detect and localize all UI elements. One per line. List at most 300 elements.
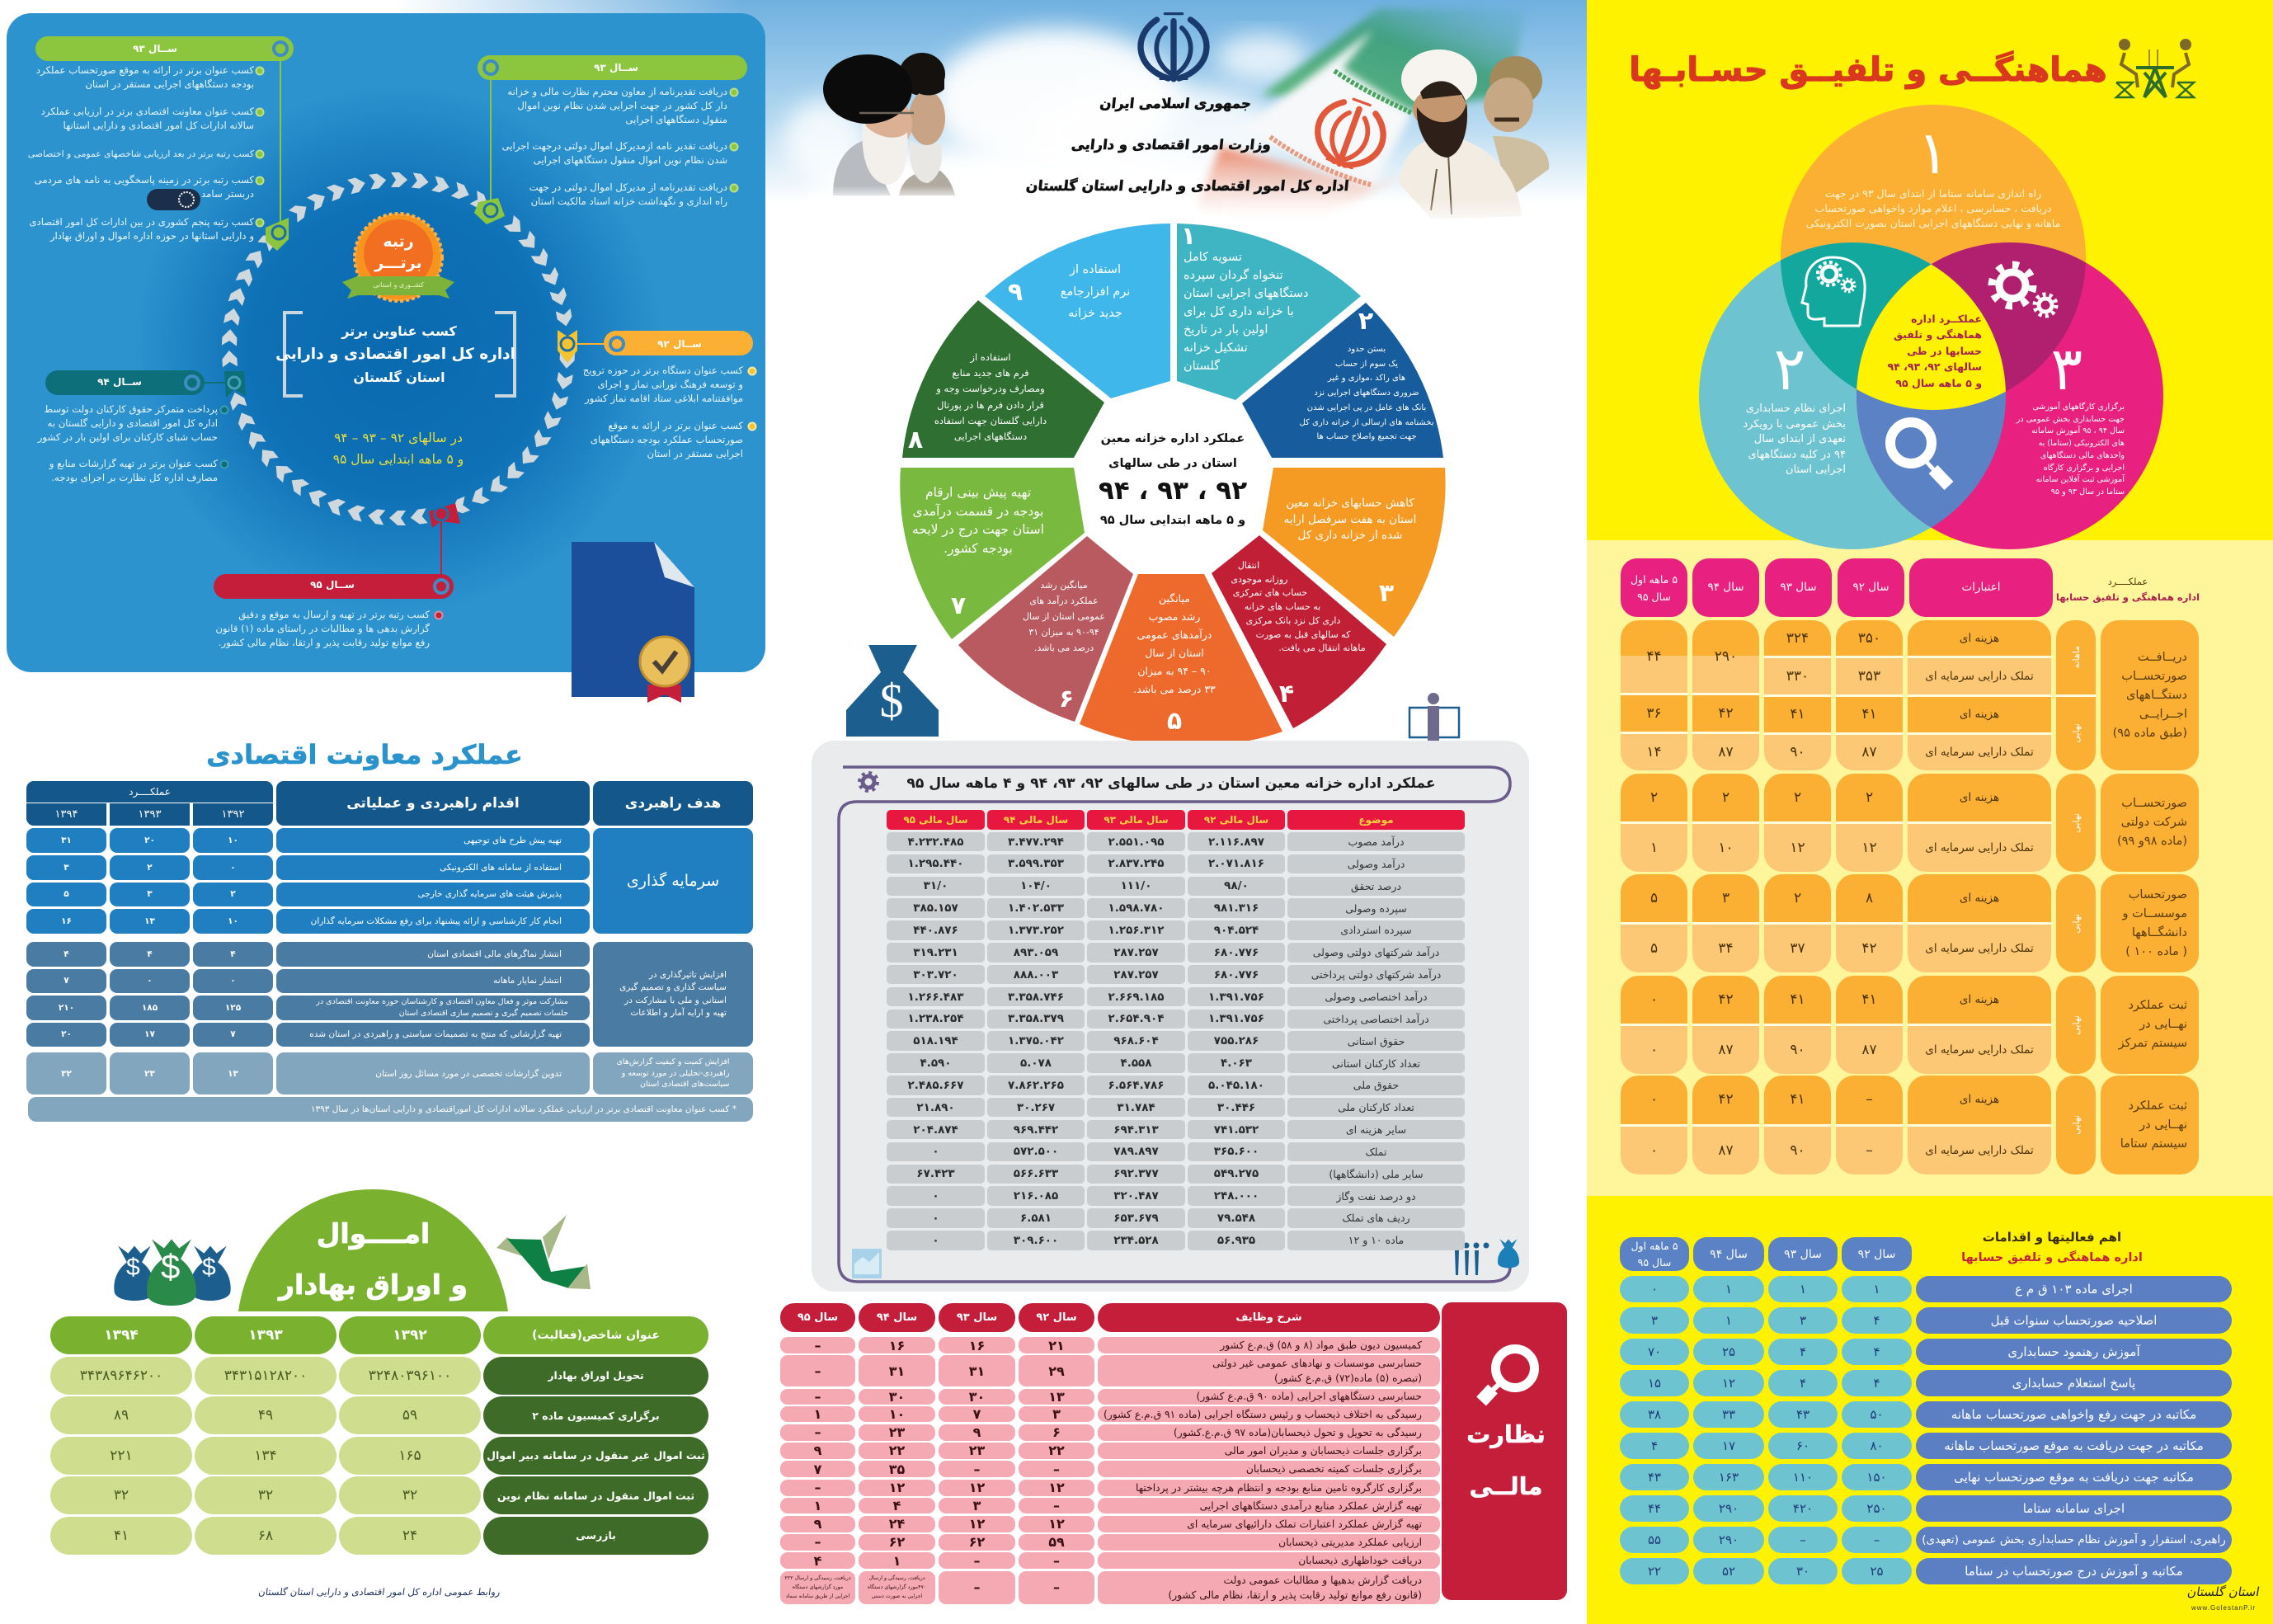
assets and securities table: عنوان شاخص(فعالیت) bbox=[532, 1329, 660, 1342]
treasury table: ۱.۲۶۶.۴۸۳ bbox=[908, 990, 963, 1003]
dollar signs: $ bbox=[126, 1254, 140, 1281]
oversight table body: ۳ bbox=[973, 1498, 981, 1513]
text: year 93 left list: کسب رتبه برتر در بعد ارزیابی شاخصهای عمومی و اختصاصی bbox=[28, 148, 254, 159]
oversight table body: ۱۲ bbox=[969, 1480, 985, 1495]
table 1 group: executive statements: ۱۴ bbox=[1646, 744, 1662, 760]
table 1 group: executive statements: تملک دارایی سرمایه ای bbox=[1925, 670, 2034, 683]
treasury table: سایر ملی (دانشگاهها) bbox=[1329, 1168, 1424, 1180]
center brackets bbox=[285, 313, 515, 396]
table 1 group: executive statements: (طبق ماده ۹۵) bbox=[2113, 726, 2187, 739]
treasury table: درصد تحقق bbox=[1351, 880, 1401, 892]
treasury table: ۷۴۱.۵۳۲ bbox=[1214, 1123, 1259, 1137]
table 1 group: institutions: ۴۲ bbox=[1861, 940, 1877, 957]
oversight table header: سال ۹۳ bbox=[957, 1311, 997, 1324]
icon: chart bbox=[852, 1249, 882, 1278]
table 1 group: state company: ۱ bbox=[1650, 840, 1658, 856]
wheel segment text 2: جهت تجمیع واصلاح حساب ها bbox=[1316, 432, 1417, 441]
economic table header: هدف راهبردی bbox=[625, 795, 721, 812]
venn center text: و ۵ ماهه سال ۹۵ bbox=[1895, 377, 1982, 389]
venn text 1: ماهانه و نهایی دستگاههای اجرایی استان بصورت الکترونیکی bbox=[1806, 217, 2060, 229]
economic table group: investment: تهیه پیش طرح های توجیهی bbox=[464, 836, 562, 845]
treasury table: ۷۵۵.۲۸۶ bbox=[1214, 1034, 1259, 1047]
treasury table: ۶۹۲.۳۷۷ bbox=[1113, 1167, 1159, 1180]
assets and securities table: ۶۸ bbox=[258, 1528, 273, 1544]
table 2 activities: اجرای ماده ۱۰۳ ق م ع bbox=[2015, 1282, 2133, 1297]
economic table group: investment bbox=[26, 828, 753, 934]
oversight table body: ۲۳ bbox=[969, 1443, 985, 1458]
economic table group: policy influence: تهیه گزارشاتی که منتج به تصمیمات سیاستی و راهبردی در استان شده bbox=[309, 1029, 562, 1039]
table 1 group: institutions: ۳۷ bbox=[1790, 940, 1805, 957]
treasury table: درآمد وصولی bbox=[1348, 858, 1405, 870]
economic table group: policy influence: ۷ bbox=[230, 1029, 236, 1039]
table 1 group: central system: ۸۷ bbox=[1861, 1042, 1877, 1058]
treasury table: ۶.۵۶۴.۷۸۶ bbox=[1108, 1079, 1164, 1092]
treasury table: ۶۸۰.۷۷۶ bbox=[1214, 946, 1259, 959]
oversight table body: حسابرسی دستگاههای اجرایی (ماده ۹۰ ق.م.ع کشور) bbox=[1197, 1391, 1422, 1402]
oversight table body: ۹ bbox=[973, 1424, 981, 1440]
economic table group: reports: تدوین گزارشات تخصصی در مورد مسائل روز استان bbox=[375, 1069, 562, 1079]
economic table group: policy influence: ۷ bbox=[64, 976, 69, 986]
table 2 activities: ۱۱۰ bbox=[1793, 1470, 1813, 1485]
pill label yellow: ســال ۹۲ bbox=[657, 338, 702, 350]
table 1 group: state company: ۱۰ bbox=[1718, 840, 1734, 856]
oversight table body: رسیدگی به اختلاف ذیحساب و رئیس دستگاه اجرایی (ماده ۹۱ ق.م.ع کشور) bbox=[1104, 1409, 1422, 1420]
pill label teal: ســال ۹۴ bbox=[97, 376, 142, 388]
table 1 header bbox=[1621, 558, 2053, 617]
header titles: اداره کل امور اقتصادی و دارایی استان گلستان bbox=[1025, 178, 1350, 195]
wheel segment text 4: ماهانه انتقال می یافت. bbox=[1278, 643, 1366, 653]
oversight table body: (تبصره (۵) ماده(۷۲) ق.م.ع کشور) bbox=[1274, 1372, 1422, 1384]
dollar sign on money bag: $ bbox=[879, 674, 904, 727]
seal text: رتبه bbox=[383, 233, 414, 251]
treasury table: ۳۱۹.۲۳۱ bbox=[913, 946, 958, 959]
treasury table: ۳.۳۵۸.۷۴۶ bbox=[1008, 990, 1064, 1003]
economic table group: policy influence: ۰ bbox=[230, 976, 236, 986]
economic table group: reports bbox=[28, 1052, 753, 1094]
wheel segment text 8: قرار دادن فرم ها در پورتال bbox=[937, 399, 1044, 411]
treasury table: ۵۶۶.۶۳۳ bbox=[1014, 1167, 1058, 1180]
table 1 group: sanama system: نهــایی در bbox=[2139, 1118, 2187, 1132]
wheel segment text 7: بودجه در قسمت درآمدی bbox=[913, 503, 1043, 518]
table 2 activities: ۱۶۳ bbox=[1719, 1470, 1739, 1485]
ribbon text: کشــوری و استانی bbox=[373, 281, 424, 289]
treasury table: سپرده استردادی bbox=[1340, 924, 1412, 936]
panel: yellow right column background bbox=[1587, 0, 2273, 1624]
treasury table: درآمد مصوب bbox=[1348, 836, 1405, 848]
table 2 activities: اجرای سامانه ستاما bbox=[2023, 1501, 2125, 1516]
oversight table body: ۲۱ bbox=[1048, 1338, 1065, 1353]
oversight table body: ۳۵ bbox=[889, 1462, 905, 1477]
oversight table header: سال ۹۴ bbox=[877, 1311, 917, 1324]
oversight table header: سال ۹۲ bbox=[1036, 1311, 1077, 1324]
treasury table: ۱.۲۵۶.۳۱۲ bbox=[1108, 924, 1164, 937]
oversight table body: ۱۶ bbox=[889, 1338, 905, 1353]
wheel segment text 5: ۳۳ درصد می باشد. bbox=[1133, 683, 1216, 695]
economic table group: policy influence: ۴ bbox=[147, 949, 153, 959]
wheel segment text 3: کاهش حسابهای خزانه معین bbox=[1286, 497, 1414, 510]
wheel segment text 1: اولین بار در تاریخ bbox=[1184, 323, 1268, 337]
table 1 group: central system: ۸۷ bbox=[1718, 1042, 1734, 1058]
economic table group: investment: ۰ bbox=[230, 863, 236, 873]
table 1 group: sanama system: سیستم ستاما bbox=[2120, 1137, 2187, 1150]
treasury table: درآمد شرکتهای دولتی پرداختی bbox=[1311, 968, 1441, 981]
economic table group: reports: ۳۲ bbox=[61, 1069, 72, 1079]
oversight panel title: مالــی bbox=[1470, 1472, 1542, 1500]
panel: top ranks background bbox=[7, 13, 765, 672]
table 2 header: سال ۹۲ bbox=[1858, 1247, 1895, 1260]
table 1 group: sanama system: ۹۰ bbox=[1790, 1142, 1805, 1159]
wheel segment text 4: روزانه موجودی bbox=[1231, 574, 1288, 585]
icon: magnifier bbox=[1890, 422, 1949, 486]
table 2 activities: ۱ bbox=[1873, 1282, 1880, 1297]
assets and securities table: ۳۲ bbox=[402, 1487, 417, 1504]
venn number 2: ۲ bbox=[1774, 334, 1805, 403]
oversight table body: ۲۲ bbox=[1048, 1443, 1065, 1458]
economic table group: reports: افزایش کمیت و کیفیت گزارش‌های bbox=[617, 1057, 730, 1066]
oversight table body: ارزیابی عملکرد مدیریتی ذیحسابان bbox=[1278, 1537, 1422, 1548]
venn text 3: ستاما در سال ۹۳ و ۹۵ bbox=[2051, 487, 2125, 497]
treasury table: ۴۴۰.۸۷۶ bbox=[913, 924, 958, 937]
table 1 header: سال ۹۵ bbox=[1637, 591, 1671, 602]
venn text 3: های الکترونیکی (ستاما) به bbox=[2039, 439, 2125, 448]
oversight table body: – bbox=[973, 1579, 980, 1595]
treasury table: تملک bbox=[1365, 1146, 1387, 1158]
table 1 group: state company: ۲ bbox=[1722, 789, 1729, 806]
panel: treasury table background bbox=[812, 741, 1529, 1292]
header titles: جمهوری اسلامی ایران bbox=[1099, 96, 1252, 111]
saamad logo bbox=[147, 189, 200, 210]
venn number 3: ۳ bbox=[2051, 334, 2082, 403]
wheel numbers: ۱ bbox=[1181, 222, 1196, 251]
wheel numbers: ۴ bbox=[1279, 680, 1294, 708]
treasury table: ۲.۶۶۹.۱۸۵ bbox=[1108, 990, 1164, 1003]
table 1 group: executive statements: دریــافــت bbox=[2138, 650, 2187, 663]
economic table group: investment: استفاده از سامانه های الکترونیکی bbox=[440, 863, 562, 873]
wheel center text bbox=[1099, 432, 1247, 527]
assets and securities table: ۴۹ bbox=[258, 1407, 273, 1424]
economic table group: investment: ۱۶ bbox=[61, 916, 72, 926]
table 1 group: state company: ۲ bbox=[1650, 789, 1658, 806]
period subtitle: در سالهای ۹۲ – ۹۳ – ۹۴ bbox=[334, 431, 463, 445]
oversight table body: ۲۳ bbox=[889, 1424, 905, 1440]
table 1 header: ۵ ماهه اول bbox=[1631, 572, 1678, 586]
economic table group: policy influence: ۱۸۵ bbox=[142, 1003, 158, 1013]
wheel numbers bbox=[908, 222, 1394, 736]
wheel segment text 1: با خزانه داری کل برای bbox=[1184, 305, 1294, 318]
text: year 93 right list: راه اندازی و نگهداشت خزانه اسناد مالکیت استان bbox=[531, 195, 727, 207]
text: year 92 list: صورتحساب عملکرد بودجه دستگاههای bbox=[591, 434, 743, 445]
economic table group: policy influence: مشارکت موثر و فعال معاون اقتصادی و کارشناسان حوزه معاونت اقتصادی در bbox=[316, 997, 568, 1006]
table 2 activities: راهبری، استقرار و آموزش نظام حسابداری بخش عمومی (تعهدی) bbox=[1922, 1533, 2226, 1546]
assets and securities table: ۸۹ bbox=[114, 1407, 129, 1424]
table 2 activities: ۶۰ bbox=[1796, 1438, 1809, 1453]
treasury table: ۶۷.۴۲۳ bbox=[916, 1167, 955, 1180]
treasury table: ۱.۲۹۵.۴۴۰ bbox=[908, 857, 963, 870]
table 1 group: institutions: ۳ bbox=[1722, 890, 1729, 906]
text: year 95 list: کسب رتبه برتر در تهیه و ارسال به موقع و دقیق bbox=[238, 609, 430, 620]
assets and securities table: ثبت اموال غیر منقول در سامانه دبیر اموال bbox=[487, 1449, 705, 1462]
economic table header bbox=[26, 781, 753, 826]
wheel segment text 4: حساب های تمرکزی bbox=[1233, 587, 1307, 598]
table 1 group: state company: هزینه ای bbox=[1960, 791, 1999, 804]
table 1 group: executive statements: ۴۴ bbox=[1646, 648, 1662, 665]
venn center text bbox=[1878, 311, 1982, 391]
wheel center text: ۹۲ ، ۹۳ ، ۹۴ bbox=[1099, 476, 1247, 506]
oversight table body: – bbox=[1053, 1553, 1060, 1569]
seal text: برتـــر bbox=[374, 254, 422, 272]
oversight table body: ۳۱ bbox=[889, 1363, 905, 1379]
icon: magnifier white bbox=[1481, 1349, 1534, 1401]
treasury table: ۳.۴۷۷.۲۹۴ bbox=[1008, 836, 1064, 849]
icon: head with gears bbox=[1802, 257, 1865, 326]
oversight table body: ۶۲ bbox=[889, 1534, 905, 1550]
table 2 activities: ۲۹۰ bbox=[1719, 1532, 1739, 1547]
treasury table: ۲.۸۳۷.۲۴۵ bbox=[1108, 857, 1164, 870]
table 2 activities: اصلاحیه صورتحساب سنوات قبل bbox=[1991, 1313, 2157, 1328]
table 2 header: سال ۹۴ bbox=[1710, 1247, 1748, 1260]
text: year 93 right list: دار کل کشور در جهت اجرایی شدن نظام نوین اموال bbox=[517, 100, 727, 111]
venn center text: هماهنگی و تلفیق bbox=[1894, 328, 1982, 341]
text: year 92 list: کسب عنوان دستگاه برتر در حوزه ترویج bbox=[583, 365, 743, 376]
treasury table: ۱.۳۷۳.۲۵۲ bbox=[1008, 924, 1064, 937]
table 2 activities: پاسخ استعلام حسابداری bbox=[2012, 1376, 2135, 1391]
table 1 group: central system: نهــایی در bbox=[2139, 1018, 2187, 1031]
economic table group: investment: ۱۳ bbox=[144, 916, 155, 926]
venn text 1 bbox=[1804, 186, 2063, 231]
period subtitle bbox=[333, 431, 464, 467]
table 1 group: institutions: ۸ bbox=[1866, 890, 1873, 906]
table 1 group: sanama system: ۰ bbox=[1650, 1091, 1658, 1108]
table 1 group: central system: ۴۲ bbox=[1718, 991, 1734, 1008]
wheel segment text 2: بخشنامه های ارسالی از خزانه داری کل bbox=[1299, 418, 1434, 427]
treasury table: ۲۸۷.۲۵۷ bbox=[1113, 946, 1159, 959]
table 2 activities: مکاتبه در جهت دریافت به موقع صورتحساب ماهانه bbox=[1944, 1438, 2204, 1453]
treasury table: سال مالی ۹۲ bbox=[1204, 814, 1268, 826]
table 1 group: institutions: دانشگــاهها bbox=[2132, 925, 2187, 939]
treasury table: ۳۱/۰ bbox=[924, 879, 948, 892]
wheel numbers: ۹ bbox=[1008, 278, 1023, 307]
oversight table body: حسابرسی موسسات و نهادهای عمومی غیر دولتی bbox=[1212, 1358, 1422, 1369]
wheel numbers: ۸ bbox=[908, 426, 923, 454]
treasury table: ۰ bbox=[932, 1212, 939, 1225]
dome title bbox=[238, 1208, 508, 1311]
table 1 group: institutions: هزینه ای bbox=[1960, 892, 1999, 905]
text: year 94 list: مصارف اداره کل نظارت بر اجرای بودجه. bbox=[51, 472, 218, 483]
table 1 title bbox=[2054, 574, 2202, 605]
treasury table bbox=[887, 810, 1465, 1250]
economic table group: policy influence: ۱۲۵ bbox=[225, 1003, 241, 1013]
wheel segment text 8: دستگاههای اجرایی bbox=[954, 431, 1027, 442]
table 2 header: سال ۹۳ bbox=[1784, 1247, 1822, 1260]
table 2 activities: ۴ bbox=[1800, 1344, 1806, 1359]
table 2 header bbox=[1620, 1237, 1912, 1271]
table 1 group: sanama system bbox=[1621, 1076, 2199, 1174]
table 2 activities: ۳ bbox=[1800, 1313, 1806, 1328]
oversight table body: ۳۰ bbox=[969, 1389, 985, 1405]
treasury table: ۲۰۴.۸۷۴ bbox=[913, 1123, 958, 1137]
table 1 group: central system: تملک دارایی سرمایه ای bbox=[1925, 1043, 2034, 1057]
table 1 group: sanama system: نهایی bbox=[2070, 1115, 2082, 1135]
economic table group: investment: ۱۰ bbox=[228, 836, 238, 845]
oversight table body: – bbox=[1053, 1462, 1060, 1477]
wheel segment text 6: عمومی استان از سال bbox=[1023, 611, 1105, 622]
table 2 activities: ۵۵ bbox=[1648, 1532, 1661, 1547]
wheel segment text 6: درصد می باشد. bbox=[1034, 643, 1094, 653]
table 2 activities: مکاتبه و آموزش درج صورتحساب در سناما bbox=[1965, 1564, 2183, 1579]
treasury table: ۰ bbox=[932, 1189, 939, 1203]
table 1 group: executive statements: ۳۲۴ bbox=[1786, 630, 1809, 647]
wheel numbers: ۵ bbox=[1167, 707, 1182, 736]
oversight table body: تهیه گزارش عملکرد منابع درآمدی دستگاههای اجرایی bbox=[1200, 1500, 1422, 1512]
treasury table: ۳۱.۷۸۴ bbox=[1117, 1101, 1155, 1114]
treasury table: ۷۸۹.۸۹۷ bbox=[1113, 1145, 1159, 1158]
wheel segment text 4 bbox=[1231, 560, 1366, 653]
assets and securities table: ۳۲۴۸۰۳۹۶۱۰۰ bbox=[369, 1367, 451, 1384]
treasury table: ۰ bbox=[932, 1234, 939, 1247]
text: year 93 right list bbox=[501, 86, 727, 207]
economic table group: investment: ۳ bbox=[147, 889, 153, 899]
assets and securities table: ۳۴۳۱۵۱۲۸۲۰۰ bbox=[224, 1367, 307, 1384]
portraits: leaders bbox=[808, 53, 973, 202]
wheel center text: و ۵ ماهه ابتدایی سال ۹۵ bbox=[1100, 514, 1245, 527]
table 1 title: اداره هماهنگی و تلفیق حسابها bbox=[2056, 591, 2200, 603]
treasury table: ماده ۱۰ و ۱۲ bbox=[1348, 1234, 1404, 1246]
text: year 94 list: پرداخت متمرکز حقوق کارکنان دولت توسط bbox=[44, 403, 218, 415]
table 2 activities: ۲۵ bbox=[1870, 1564, 1884, 1579]
oversight table body: – bbox=[815, 1534, 821, 1550]
assets and securities table: ۱۳۴ bbox=[254, 1447, 277, 1464]
wheel segment text 9 bbox=[1061, 263, 1130, 320]
economic table group: reports: سیاست‌های اقتصادی استان bbox=[640, 1080, 730, 1089]
venn text 3: آموزشی ثبت آفلاین سامانه bbox=[2036, 475, 2125, 484]
text: year 94 list bbox=[37, 403, 218, 483]
treasury table: ۲۳۴.۵۲۸ bbox=[1113, 1234, 1159, 1247]
table 1 group: executive statements: ۳۵۰ bbox=[1858, 630, 1880, 647]
oversight table body: برگزاری جلسات ذیحسابان و مدیران امور مالی bbox=[1225, 1445, 1422, 1457]
table 1 group: executive statements: ماهانه bbox=[2070, 646, 2082, 668]
table 2 activities: ۴ bbox=[1873, 1313, 1880, 1328]
table 1 group: executive statements: ۸۷ bbox=[1861, 744, 1877, 760]
table 1 group: executive statements bbox=[1621, 620, 2199, 770]
table 2 activities: ۱۵۰ bbox=[1866, 1470, 1887, 1485]
left panel center heading: کسب عناوین برتر bbox=[341, 323, 457, 339]
text: year 95 list: رفع موانع تولید رقابت پذیر و ارتقا، نظام مالی کشور. bbox=[219, 637, 430, 648]
text: year 92 list: اجرایی مستقر در استان bbox=[647, 448, 743, 459]
treasury table: ۴.۰۶۳ bbox=[1221, 1057, 1252, 1070]
treasury table: ۸۸۸.۰۰۳ bbox=[1014, 968, 1058, 981]
treasury table: ۲۴۸.۰۰۰ bbox=[1214, 1189, 1259, 1203]
text: year 93 left list: کسب عنوان معاونت اقتصادی برتر در ارزیابی عملکرد bbox=[41, 106, 254, 117]
wheel segment text 8: ومصارف ودرخواست وجه و bbox=[936, 383, 1045, 394]
oversight table body: ۳۱ bbox=[969, 1363, 985, 1379]
assets and securities table: بازرسی bbox=[576, 1529, 616, 1542]
wheel segment text 9: استفاده از bbox=[1070, 263, 1121, 276]
venn center text: عملکــرد اداره bbox=[1911, 313, 1982, 325]
treasury table: ۴.۲۳۲.۴۸۵ bbox=[908, 836, 963, 849]
table 2 activities: ۴ bbox=[1873, 1344, 1880, 1359]
oversight table body: ۷ bbox=[814, 1462, 821, 1477]
treasury table: سال مالی ۹۳ bbox=[1104, 814, 1169, 826]
assets and securities table: ثبت اموال منقول در سامانه نظام نوین bbox=[497, 1490, 694, 1502]
oversight table header: شرح وظایف bbox=[1235, 1311, 1302, 1324]
economic table group: investment: ۲۰ bbox=[144, 836, 155, 845]
oversight table body: ۱۳ bbox=[1048, 1389, 1065, 1405]
economic table group: investment: سرمایه گذاری bbox=[627, 872, 719, 890]
oversight table body: مورد گزارشهای دستگاه bbox=[793, 1584, 843, 1590]
wheel segment text 9: نرم افزارجامع bbox=[1061, 285, 1130, 299]
oversight table body: ۱۲ bbox=[969, 1516, 985, 1532]
oversight table body: ۱۶ bbox=[969, 1338, 985, 1353]
venn text 1: راه اندازی سامانه ستاما از ابتدای سال ۹۳ در جهت bbox=[1825, 187, 2041, 200]
assets and securities table: ۱۳۹۲ bbox=[393, 1327, 427, 1344]
treasury table title: عملکرد اداره خزانه معین استان در طی سالهای ۹۲، ۹۳، ۹۴ و ۴ ماهه سال ۹۵ bbox=[906, 775, 1436, 792]
table 2 activities: ۳ bbox=[1651, 1313, 1658, 1328]
table 1 group: state company: نهایی bbox=[2070, 813, 2082, 832]
oversight panel title bbox=[1442, 1409, 1570, 1513]
table 2 title bbox=[1918, 1227, 2186, 1268]
treasury table: ۵۴۹.۲۷۵ bbox=[1214, 1167, 1259, 1180]
treasury table: درآمد اختصاصی وصولی bbox=[1325, 991, 1428, 1003]
icon: people at a desk bbox=[2116, 39, 2194, 97]
table 1 group: sanama system: ۰ bbox=[1650, 1142, 1658, 1159]
text: year 93 right list: دریافت تقدیرنامه از مدیرکل اموال دولتی در جهت bbox=[529, 181, 727, 193]
oversight table body: ۶۲ bbox=[969, 1534, 985, 1550]
table 1 group: executive statements: اجــرایــی bbox=[2139, 708, 2187, 721]
treasury table: ۱.۳۷۵.۰۴۲ bbox=[1008, 1034, 1064, 1047]
dome title: و اوراق بهادار bbox=[279, 1269, 468, 1301]
oversight table body: ۱۲ bbox=[1048, 1480, 1065, 1495]
treasury wheel segments bbox=[900, 224, 1446, 747]
left panel center heading: اداره کل امور اقتصادی و دارایی bbox=[275, 346, 515, 363]
oversight table body: ۱ bbox=[814, 1406, 821, 1422]
table 2 activities: ۴ bbox=[1800, 1376, 1806, 1391]
oversight table body: رسیدگی به تحویل و تحول ذیحسابان(ماده ۹۷ ق.م.ع.کشور) bbox=[1174, 1427, 1422, 1438]
wheel segment text 4: که سالهای قبل به صورت bbox=[1256, 629, 1350, 640]
treasury table: ۹۸۱.۳۱۶ bbox=[1214, 901, 1259, 915]
treasury table: ۳۰.۲۶۷ bbox=[1017, 1101, 1055, 1114]
economic table group: investment: ۵ bbox=[64, 889, 69, 899]
icon: gear bbox=[859, 773, 878, 791]
table 1 group: executive statements: ۸۷ bbox=[1718, 744, 1734, 760]
table 2 activities: ۲۵۰ bbox=[1866, 1501, 1887, 1516]
wheel segment text 5: میانگین bbox=[1159, 592, 1190, 605]
economic table group: policy influence: سیاست گذاری و تصمیم گیری bbox=[619, 982, 727, 992]
venn text 2 bbox=[1732, 402, 1846, 478]
economic table header: اقدام راهبردی و عملیاتی bbox=[346, 795, 520, 812]
venn text 2: ۹۴ در کلیه دستگاههای bbox=[1748, 449, 1846, 460]
treasury table: سایر هزینه ای bbox=[1346, 1123, 1406, 1136]
table 1 group: institutions bbox=[1621, 874, 2199, 972]
pill label right green: ســال ۹۳ bbox=[594, 62, 638, 73]
treasury table: ۳.۵۹۹.۳۵۳ bbox=[1008, 857, 1064, 870]
oversight table body: – bbox=[973, 1553, 980, 1569]
wheel segment text 3 bbox=[1284, 497, 1416, 542]
left panel center heading: استان گلستان bbox=[353, 370, 445, 385]
assets and securities table: ۱۶۵ bbox=[398, 1447, 421, 1464]
economic table group: policy influence: افزایش تاثیرگذاری در bbox=[649, 970, 727, 980]
table 1 group: executive statements: ۳۳۰ bbox=[1786, 668, 1809, 685]
oversight table body: (قانون رفع موانع تولید رقابت پذیر و ارتقا، نظام مالی کشور) bbox=[1168, 1589, 1422, 1601]
table 1 group: central system: ۰ bbox=[1650, 991, 1658, 1008]
economic table group: policy influence: استانی و ملی با مشارکت در bbox=[624, 995, 727, 1005]
economic table group: policy influence: جلسات تصمیم گیری و تصمیم سازی اقتصادی استان bbox=[399, 1009, 568, 1018]
text: year 94 list: اداره کل امور اقتصادی و دارایی گلستان به bbox=[47, 417, 218, 429]
wheel segment text 1 bbox=[1184, 251, 1308, 373]
table 1 header: سال ۹۲ bbox=[1852, 581, 1889, 594]
wheel center text: عملکرد اداره خزانه معین bbox=[1101, 432, 1245, 445]
treasury table: ۳.۳۵۸.۳۷۹ bbox=[1008, 1012, 1064, 1025]
treasury table: ۳۶۵.۶۰۰ bbox=[1214, 1145, 1259, 1158]
